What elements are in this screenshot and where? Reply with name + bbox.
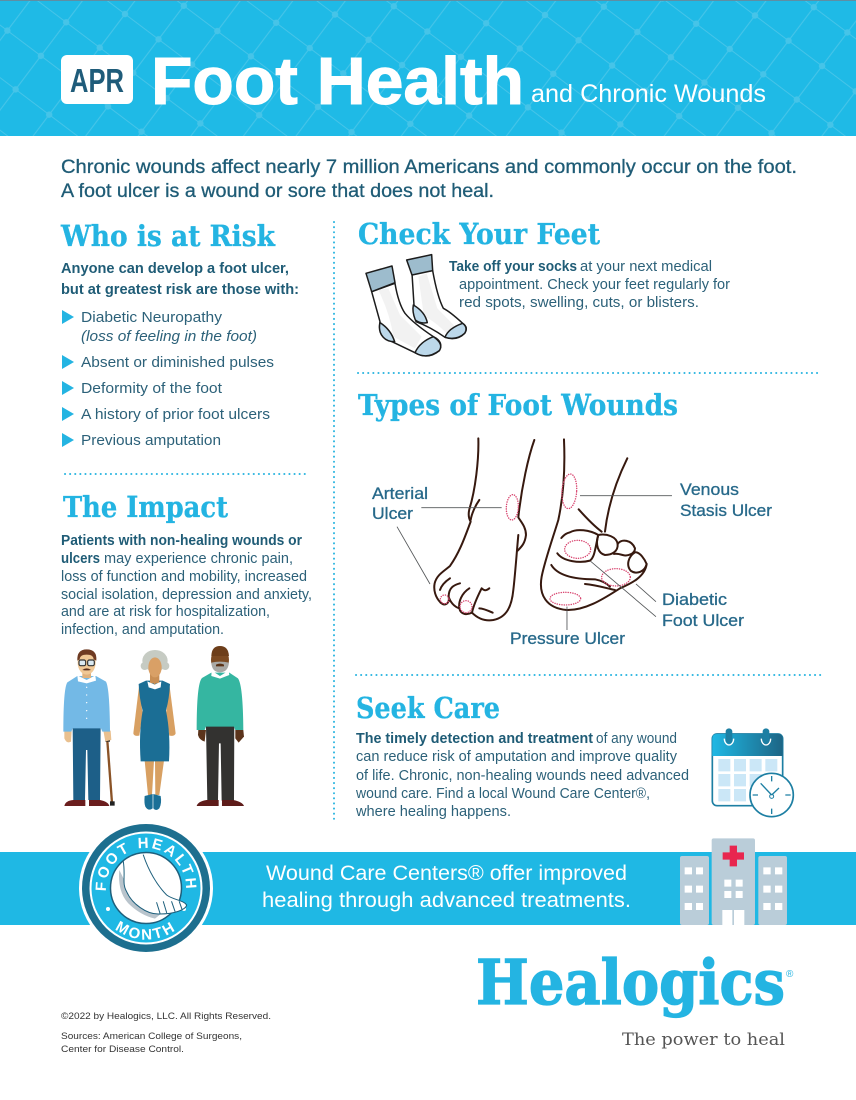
impact text: [61, 533, 312, 638]
impact text: may experience chronic pain,: [104, 551, 293, 567]
impact text: Patients with non-healing wounds or: [61, 533, 302, 549]
heading: types of foot wounds: Types of Foot Wounds: [358, 388, 678, 422]
panel: who is at risk: [60, 219, 299, 449]
logo: healogics: Healogics: [476, 946, 785, 1019]
check feet text: [449, 259, 730, 311]
footer: copyright and sources: [61, 1011, 271, 1055]
intro text: Chronic wounds affect nearly 7 million Americans and commonly occur on the foot.: [61, 157, 797, 178]
seek care text: wound care. Find a local Wound Care Center®,: [355, 786, 650, 802]
heading: seek care: Seek Care: [356, 691, 500, 725]
intro text: [61, 157, 797, 202]
intro text: A foot ulcer is a wound or sore that does not heal.: [61, 181, 494, 202]
risk intro text: [61, 261, 299, 298]
risk list: Absent or diminished pulses: [81, 354, 274, 371]
logo: healogics: ®: [786, 969, 794, 980]
label: pressure ulcer: Pressure Ulcer: [510, 630, 626, 648]
impact text: infection, and amputation.: [61, 622, 224, 638]
ulcer markers: [440, 474, 630, 613]
diagram: feet with ulcer locations: [397, 438, 672, 630]
person: woman in blue dress: [133, 650, 176, 810]
seek care text: where healing happens.: [355, 804, 511, 820]
check feet text: at your next medical: [580, 259, 712, 275]
banner: wound care centers: [0, 838, 856, 925]
banner text: healing through advanced treatments.: [262, 889, 631, 912]
seek care text: [355, 731, 689, 820]
impact text: social isolation, depression and anxiety,: [61, 587, 312, 603]
heading: who is at risk: Who is at Risk: [60, 219, 276, 253]
right foot outline: [541, 439, 647, 610]
logo: healogics: [476, 946, 794, 1049]
check feet text: appointment. Check your feet regularly for: [459, 277, 730, 293]
illustration: three people: [63, 646, 244, 810]
label: venous stasis ulcer: Stasis Ulcer: [680, 502, 773, 520]
impact text: loss of function and mobility, increased: [61, 569, 307, 585]
risk list: Diabetic Neuropathy: [81, 309, 223, 326]
heading: the impact: The Impact: [63, 490, 229, 524]
panel: the impact: [61, 490, 312, 810]
heading: check your feet: Check Your Feet: [358, 217, 601, 251]
person: man in teal sweater: [197, 646, 244, 806]
risk list: [62, 309, 274, 449]
footer: copyright and sources: Sources: American College of Surgeons,: [61, 1031, 242, 1042]
risk intro text: Anyone can develop a foot ulcer,: [61, 261, 289, 277]
label: diabetic foot ulcer: Foot Ulcer: [662, 612, 745, 630]
title: Foot Health: [151, 44, 524, 119]
label: diabetic foot ulcer: Diabetic: [662, 591, 727, 609]
impact text: and are at risk for hospitalization,: [61, 604, 270, 620]
label: venous stasis ulcer: [680, 481, 773, 520]
icon: socks: [366, 255, 466, 356]
footer: copyright and sources: ©2022 by Healogics, LLC. All Rights Reserved.: [61, 1011, 271, 1022]
icon: calendar and clock: [712, 728, 793, 817]
seek care text: of life. Chronic, non-healing wounds need advanced: [356, 768, 689, 784]
label: diabetic foot ulcer: [662, 591, 745, 630]
seek care text: The timely detection and treatment: [356, 731, 593, 747]
label: venous stasis ulcer: Venous: [680, 481, 739, 499]
icon: hospital: [680, 838, 787, 925]
risk list: Deformity of the foot: [81, 380, 223, 397]
impact text: ulcers: [61, 551, 100, 567]
panel: seek care: [355, 691, 793, 820]
seek care text: can reduce risk of amputation and improve quality: [356, 749, 678, 765]
badge foot icon: [119, 855, 187, 919]
footer: copyright and sources: Center for Disease Control.: [61, 1044, 184, 1055]
banner text: [262, 862, 631, 912]
risk list: Previous amputation: [81, 432, 221, 449]
month badge: [61, 55, 133, 104]
panel: check your feet: [358, 217, 730, 356]
banner text: Wound Care Centers® offer improved: [266, 862, 627, 885]
header banner: [0, 0, 856, 136]
badge: foot health month: [79, 824, 213, 952]
seek care text: of any wound: [596, 731, 677, 747]
check feet text: Take off your socks: [449, 259, 577, 275]
label: arterial ulcer: Arterial: [372, 485, 428, 503]
risk list: (loss of feeling in the foot): [81, 328, 257, 345]
risk list: A history of prior foot ulcers: [81, 406, 270, 423]
leader lines: [397, 496, 672, 630]
risk intro text: but at greatest risk are those with:: [61, 282, 299, 298]
tagline: The power to heal: [622, 1030, 785, 1049]
badge text: month: MONTH: [115, 920, 174, 940]
label: arterial ulcer: [372, 485, 428, 523]
month badge: APR: [70, 62, 124, 99]
left foot outline: [434, 438, 534, 620]
label: arterial ulcer: Ulcer: [372, 505, 414, 523]
subtitle: and Chronic Wounds: [531, 80, 766, 108]
panel: types of foot wounds: [358, 388, 773, 648]
person: man with cane: [63, 649, 115, 806]
badge text: foot health: FOOT HEALTH: [96, 838, 196, 890]
check feet text: red spots, swelling, cuts, or blisters.: [459, 295, 699, 311]
